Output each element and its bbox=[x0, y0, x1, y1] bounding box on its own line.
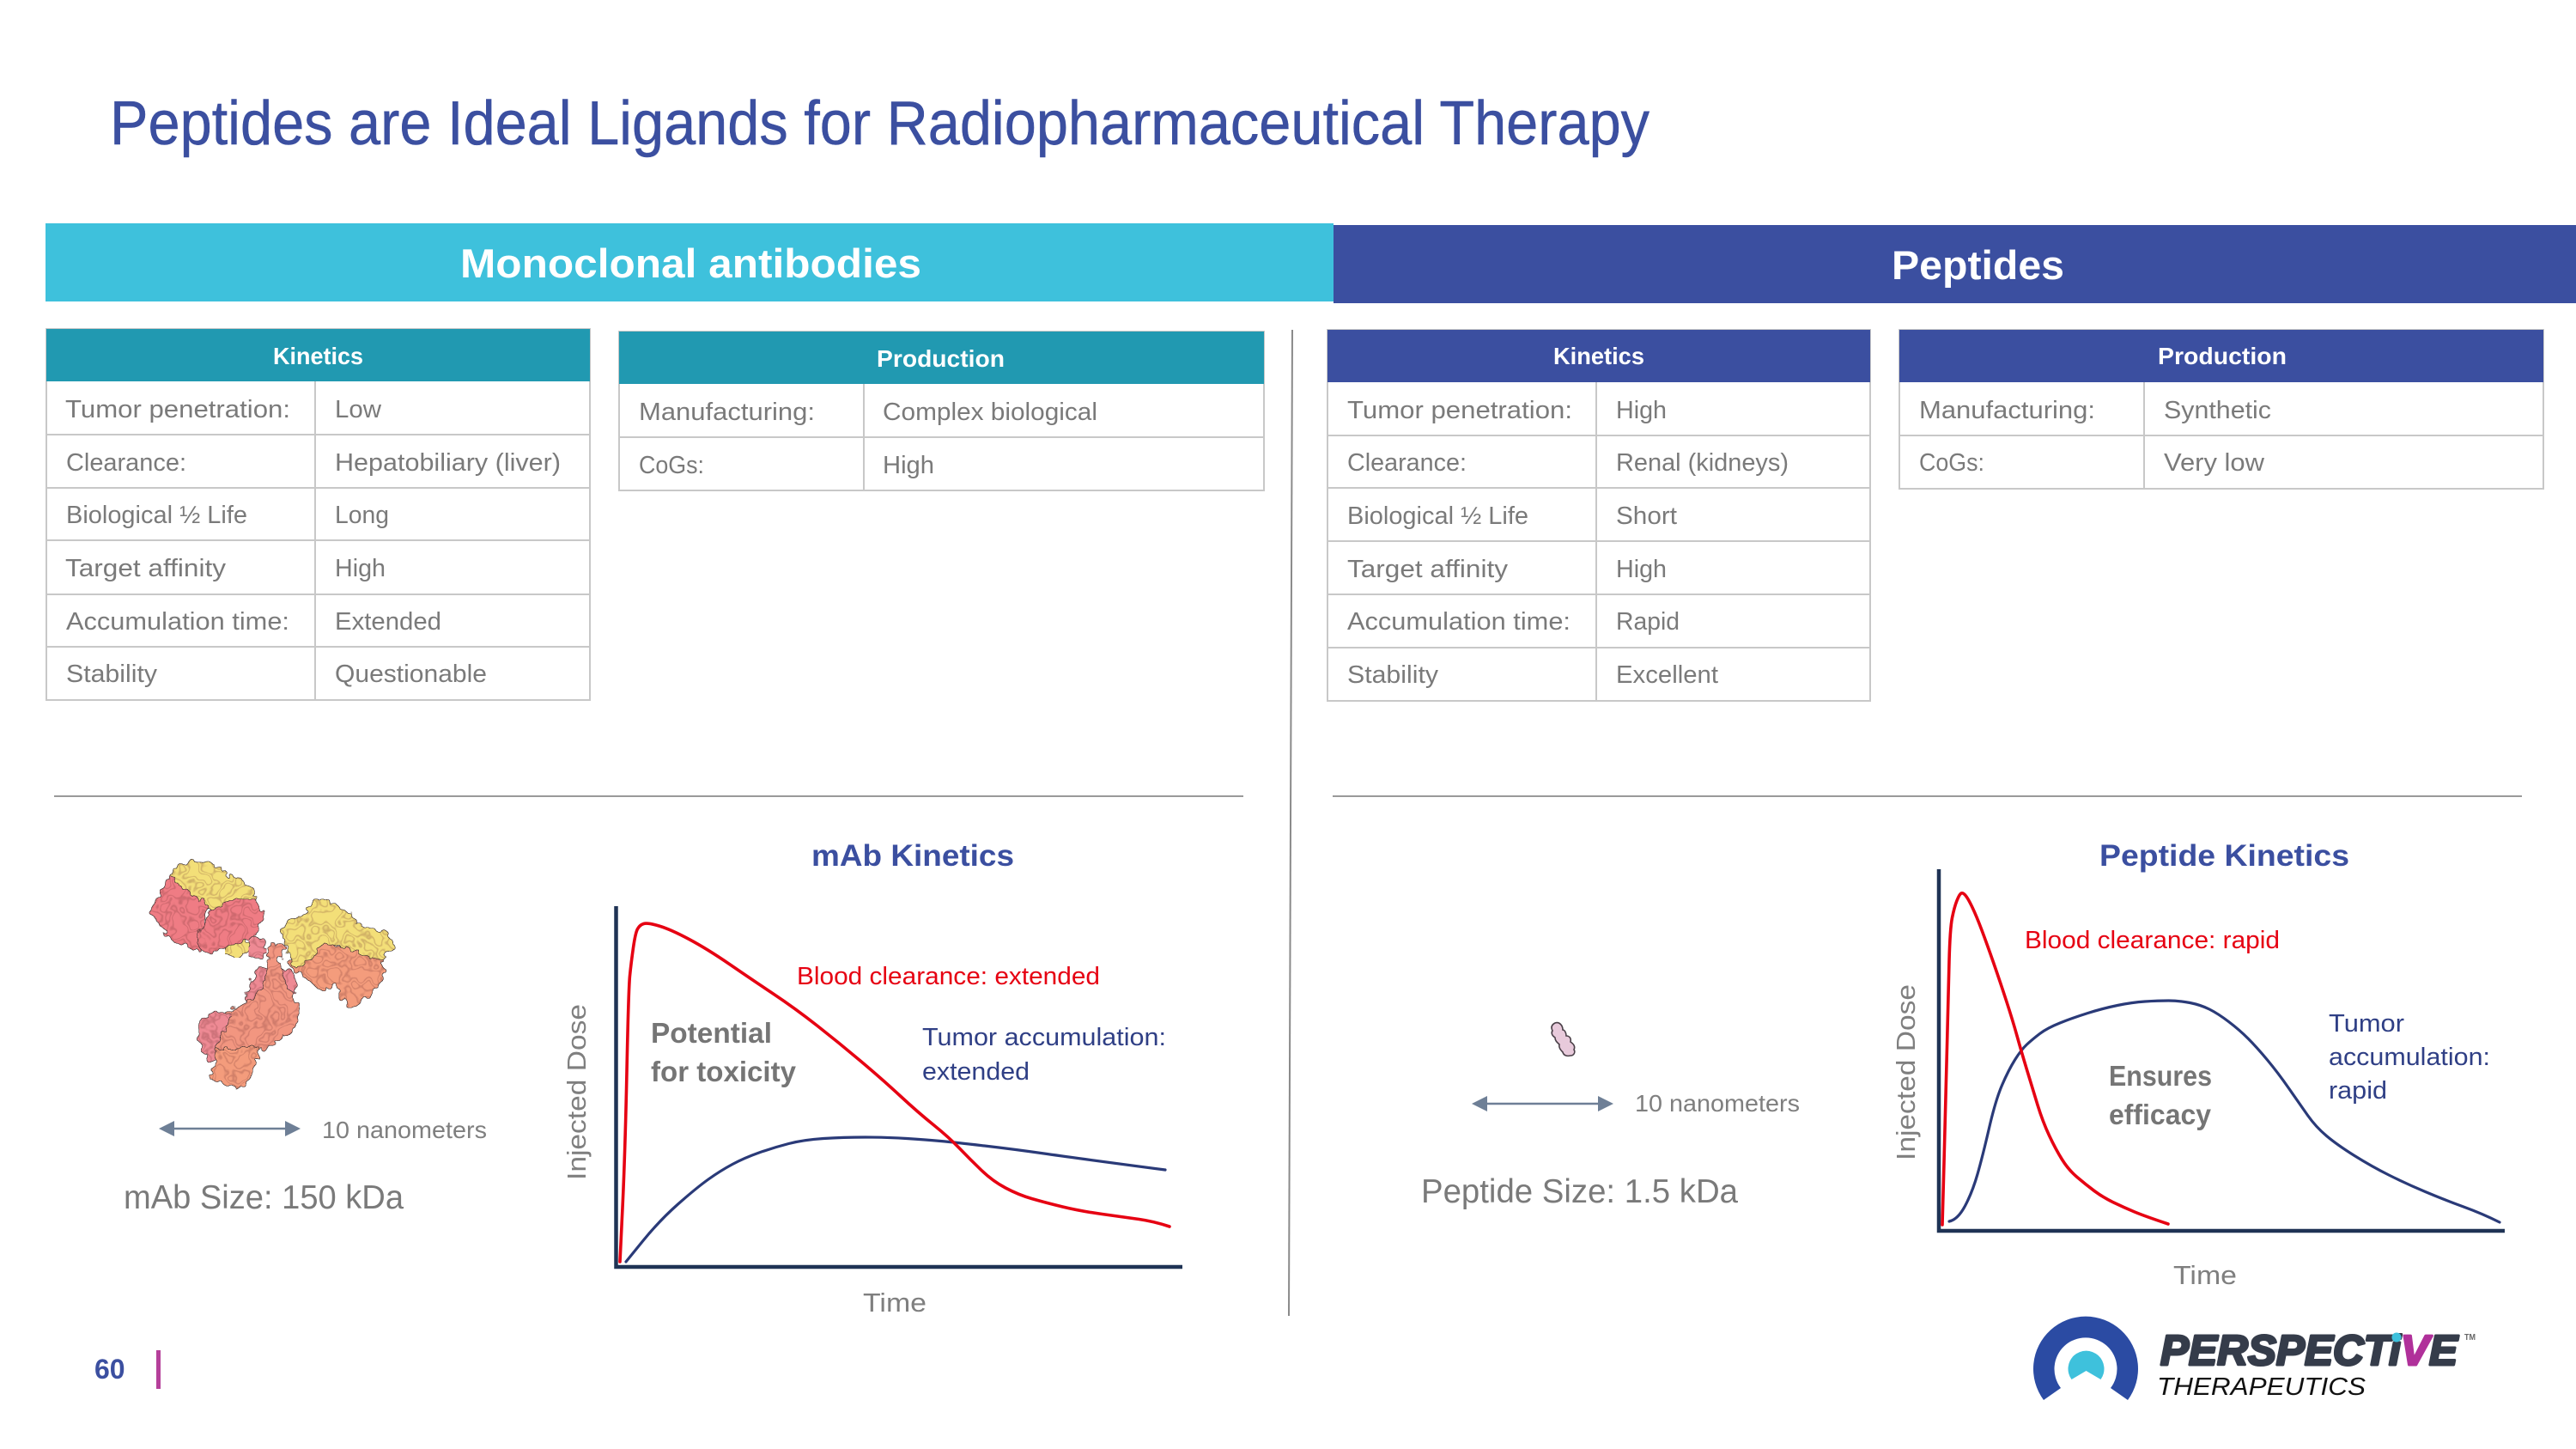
arrow: peptide 10 nm scale bbox=[1472, 1096, 1613, 1111]
table: peptide kinetics bbox=[1327, 330, 1870, 701]
row: stability: Stability bbox=[66, 661, 158, 688]
y axis label: Injected Dose bbox=[562, 1004, 592, 1180]
axes bbox=[617, 906, 1182, 1267]
chart title: Peptide Kinetics bbox=[2099, 839, 2349, 873]
callout: potential for toxicity bbox=[651, 1017, 797, 1087]
row: clearance bbox=[66, 449, 561, 477]
curve: blood clearance bbox=[620, 923, 1170, 1262]
row: cogs bbox=[639, 452, 934, 479]
row: manufacturing: Complex biological bbox=[883, 399, 1097, 426]
callout: potential for toxicity: for toxicity bbox=[651, 1056, 797, 1087]
row: accumulation time: Rapid bbox=[1616, 608, 1680, 636]
row: tumor penetration bbox=[65, 396, 382, 423]
panel header: Monoclonal antibodies: Monoclonal antibodies bbox=[460, 240, 921, 286]
axes bbox=[1939, 869, 2505, 1231]
row: tumor penetration: Tumor penetration: bbox=[65, 396, 290, 423]
row: clearance: Hepatobiliary (liver) bbox=[335, 449, 561, 477]
label: tumor accumulation rapid: Tumor bbox=[2329, 1010, 2404, 1038]
chart title: mAb Kinetics bbox=[811, 839, 1014, 873]
row: accumulation time bbox=[66, 608, 441, 636]
row: target affinity: Target affinity bbox=[65, 555, 227, 582]
row: stability: Stability bbox=[1347, 661, 1439, 689]
page number divider bbox=[156, 1350, 161, 1389]
row: stability bbox=[66, 661, 487, 688]
row: manufacturing: Manufacturing: bbox=[1919, 397, 2095, 424]
icon: antibody molecule bbox=[155, 863, 390, 1083]
callout: ensures efficacy: efficacy bbox=[2109, 1099, 2212, 1130]
row: biological half life: Short bbox=[1616, 502, 1677, 530]
label: blood clearance extended: Blood clearance: extended bbox=[797, 963, 1100, 990]
row: cogs: CoGs: bbox=[639, 452, 704, 479]
row: target affinity bbox=[1347, 556, 1667, 583]
chart: peptide kinetics bbox=[1891, 839, 2505, 1290]
row: manufacturing bbox=[639, 399, 1097, 426]
row: biological half life bbox=[1347, 502, 1677, 530]
label: tumor accumulation extended bbox=[922, 1024, 1166, 1086]
row: tumor penetration: Low bbox=[335, 396, 382, 423]
x axis label: Time bbox=[863, 1288, 927, 1318]
label: 10 nanometers: 10 nanometers bbox=[1635, 1090, 1800, 1117]
row: biological half life: Long bbox=[335, 502, 389, 529]
label: tumor accumulation extended: Tumor accumulation: bbox=[922, 1024, 1166, 1051]
label: blood clearance rapid: Blood clearance: rapid bbox=[2025, 927, 2280, 954]
row: clearance bbox=[1347, 449, 1789, 477]
label: mAb size: mAb Size: 150 kDa bbox=[124, 1179, 404, 1216]
trademark: TM bbox=[2464, 1333, 2476, 1342]
logo wordmark: PERSPECTiVE bbox=[2160, 1328, 2458, 1374]
table: mAb production bbox=[619, 332, 1264, 490]
curve: tumor accumulation bbox=[1949, 1001, 2500, 1222]
row: cogs: Very low bbox=[2164, 449, 2265, 477]
table header: Kinetics: Kinetics bbox=[273, 343, 363, 369]
table header: Production: Production bbox=[877, 345, 1005, 372]
row: stability: Excellent bbox=[1616, 661, 1718, 689]
row: accumulation time: Accumulation time: bbox=[1347, 608, 1571, 636]
label: 10 nanometers: 10 nanometers bbox=[322, 1117, 487, 1143]
row: target affinity: High bbox=[335, 555, 386, 582]
row: cogs bbox=[1919, 449, 2265, 477]
curve: tumor accumulation bbox=[626, 1137, 1165, 1262]
row: target affinity: High bbox=[1616, 556, 1667, 583]
row: clearance: Renal (kidneys) bbox=[1616, 449, 1789, 477]
y axis label: Injected Dose bbox=[1891, 984, 1921, 1160]
row: target affinity: Target affinity bbox=[1347, 556, 1509, 583]
row: biological half life bbox=[66, 502, 389, 529]
row: cogs: High bbox=[883, 452, 934, 479]
table header: Production: Production bbox=[2158, 343, 2287, 369]
row: target affinity bbox=[65, 555, 386, 582]
row: manufacturing: Manufacturing: bbox=[639, 399, 815, 426]
logo mark bbox=[2033, 1317, 2138, 1400]
x axis label: Time bbox=[2173, 1260, 2237, 1290]
table: peptide production bbox=[1899, 330, 2543, 489]
row: accumulation time: Accumulation time: bbox=[66, 608, 289, 636]
label: tumor accumulation rapid bbox=[2329, 1010, 2490, 1105]
page number: 60 bbox=[94, 1354, 125, 1385]
label: peptide size: Peptide Size: 1.5 kDa bbox=[1421, 1173, 1738, 1210]
panel header: Peptides: Peptides bbox=[1892, 242, 2064, 288]
row: stability: Questionable bbox=[335, 661, 487, 688]
curve: blood clearance bbox=[1942, 893, 2168, 1225]
row: biological half life: Biological ½ Life bbox=[66, 502, 247, 529]
row: accumulation time bbox=[1347, 608, 1680, 636]
panel header: Peptides bbox=[1334, 225, 2576, 303]
label: tumor accumulation extended: extended bbox=[922, 1058, 1030, 1086]
panel header: Monoclonal antibodies bbox=[46, 223, 1334, 301]
table header: Kinetics: Kinetics bbox=[1553, 343, 1644, 369]
label: tumor accumulation rapid: accumulation: bbox=[2329, 1044, 2490, 1071]
logo subtitle: THERAPEUTICS bbox=[2157, 1373, 2366, 1401]
row: tumor penetration: High bbox=[1616, 397, 1667, 424]
row: biological half life: Biological ½ Life bbox=[1347, 502, 1528, 530]
row: manufacturing: Synthetic bbox=[2164, 397, 2271, 424]
table: mAb kinetics bbox=[46, 329, 590, 700]
title: Peptides are Ideal Ligands for Radiopharmaceutical Therapy bbox=[110, 89, 1649, 158]
chart: mAb kinetics bbox=[562, 839, 1182, 1318]
callout: ensures efficacy bbox=[2109, 1060, 2212, 1130]
callout: potential for toxicity: Potential bbox=[651, 1017, 772, 1049]
row: clearance: Clearance: bbox=[66, 449, 186, 477]
row: tumor penetration: Tumor penetration: bbox=[1347, 397, 1572, 424]
row: manufacturing bbox=[1919, 397, 2271, 424]
row: clearance: Clearance: bbox=[1347, 449, 1467, 477]
label: tumor accumulation rapid: rapid bbox=[2329, 1077, 2387, 1105]
callout: ensures efficacy: Ensures bbox=[2109, 1060, 2212, 1092]
row: tumor penetration bbox=[1347, 397, 1667, 424]
arrow: mAb 10 nm scale bbox=[159, 1121, 301, 1136]
icon: peptide molecule bbox=[1552, 1023, 1575, 1056]
row: stability bbox=[1347, 661, 1718, 689]
row: accumulation time: Extended bbox=[335, 608, 441, 636]
logo: Perspective Therapeutics bbox=[2033, 1317, 2476, 1401]
row: cogs: CoGs: bbox=[1919, 449, 1984, 477]
